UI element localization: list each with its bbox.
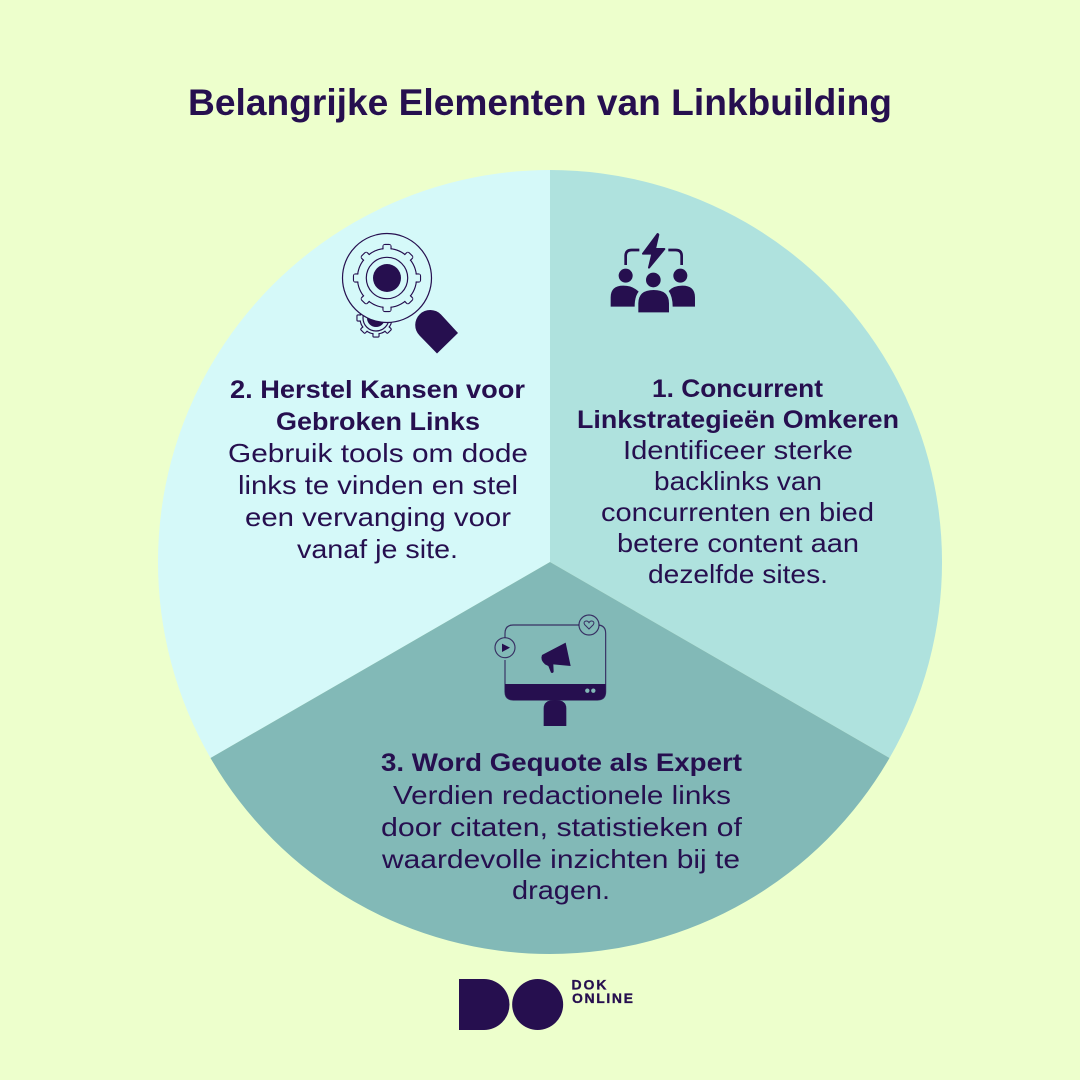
text: segment 3: dragen.: [512, 875, 610, 905]
text: segment 2: 2. Herstel Kansen voor: [230, 376, 525, 404]
text: segment 1: dezelfde sites.: [648, 559, 828, 589]
text: segment 1: Identificeer sterke: [623, 435, 853, 465]
panel: segment 3: [210, 562, 890, 954]
text: segment 1: 1. Concurrent: [652, 375, 824, 403]
text: segment 3: Verdien redactionele links: [393, 780, 731, 810]
small gear: [357, 299, 395, 337]
magnifier lens: [342, 234, 432, 322]
logo wordmark: DOK: [572, 976, 606, 992]
text: segment 1: Linkstrategieën Omkeren: [577, 406, 899, 434]
text: segment 1: backlinks van: [654, 466, 822, 496]
panel: segment 2: [158, 170, 550, 758]
text: segment 1: concurrenten en bied: [601, 497, 874, 527]
panel: segment 1: [550, 170, 942, 758]
text: segment 1: [577, 375, 899, 589]
text: segment 2: vanaf je site.: [297, 534, 458, 564]
text: segment 3: 3. Word Gequote als Expert: [381, 749, 743, 777]
magnifier handle: [415, 310, 458, 354]
logo wordmark: ONLINE: [572, 990, 633, 1006]
logo: DOK Online: [459, 976, 633, 1030]
text: segment 2: links te vinden en stel: [238, 470, 518, 500]
pie chart: [158, 170, 942, 954]
text: segment 3: door citaten, statistieken of: [381, 812, 743, 842]
large gear: [354, 244, 420, 312]
text: segment 2: [228, 376, 528, 564]
text: segment 2: Gebroken Links: [276, 408, 480, 436]
icon: gear under magnifier: [342, 234, 458, 354]
logo mark: [459, 979, 563, 1030]
icon: monitor with megaphone: [495, 615, 606, 726]
text: segment 3: waardevolle inzichten bij te: [381, 844, 740, 874]
text: segment 1: betere content aan: [617, 528, 859, 558]
text: segment 2: Gebruik tools om dode: [228, 438, 528, 468]
title: Belangrijke Elementen van Linkbuilding: [188, 82, 892, 123]
logo wordmark: [572, 976, 633, 1006]
text: segment 2: een vervanging voor: [245, 502, 511, 532]
text: segment 3: [381, 749, 743, 905]
icon: team with lightning bolt: [611, 234, 695, 312]
